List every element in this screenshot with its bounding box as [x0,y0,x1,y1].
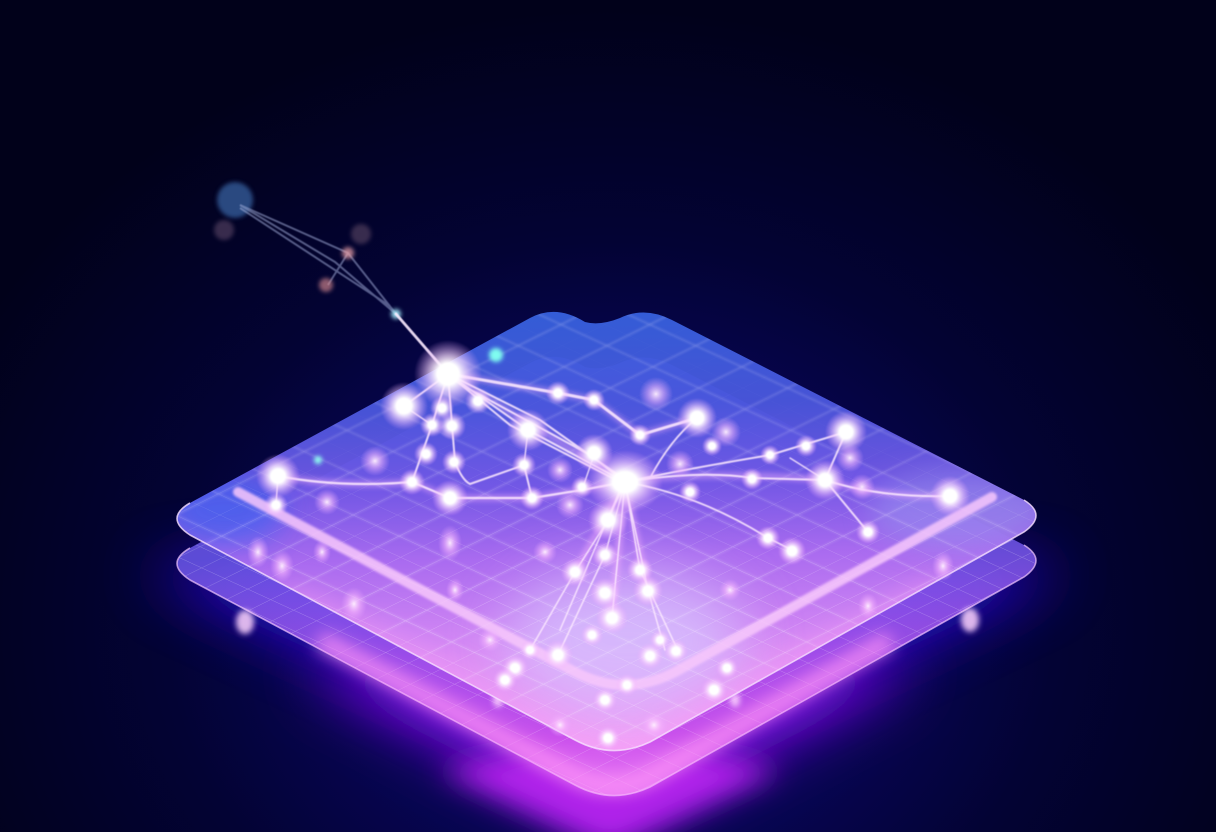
under-plate blue and purple glow [140,520,1070,832]
rising tail of network [214,182,503,464]
network links glow [278,374,950,618]
network links [276,314,950,655]
reflected dots on lower plate [236,557,979,707]
plate colour wash [176,314,1036,752]
soft out-of-focus lights [247,377,954,739]
lower reflected plate [177,357,1036,796]
lower plate bright pink band [320,640,890,785]
plate grid coarse [178,314,1018,727]
plate inner rim [238,492,992,685]
main plate [176,312,1037,752]
plate grid fine [178,454,1034,747]
plate edge [177,500,1036,751]
bottom pink wash [286,574,940,747]
network nodes [256,340,970,750]
